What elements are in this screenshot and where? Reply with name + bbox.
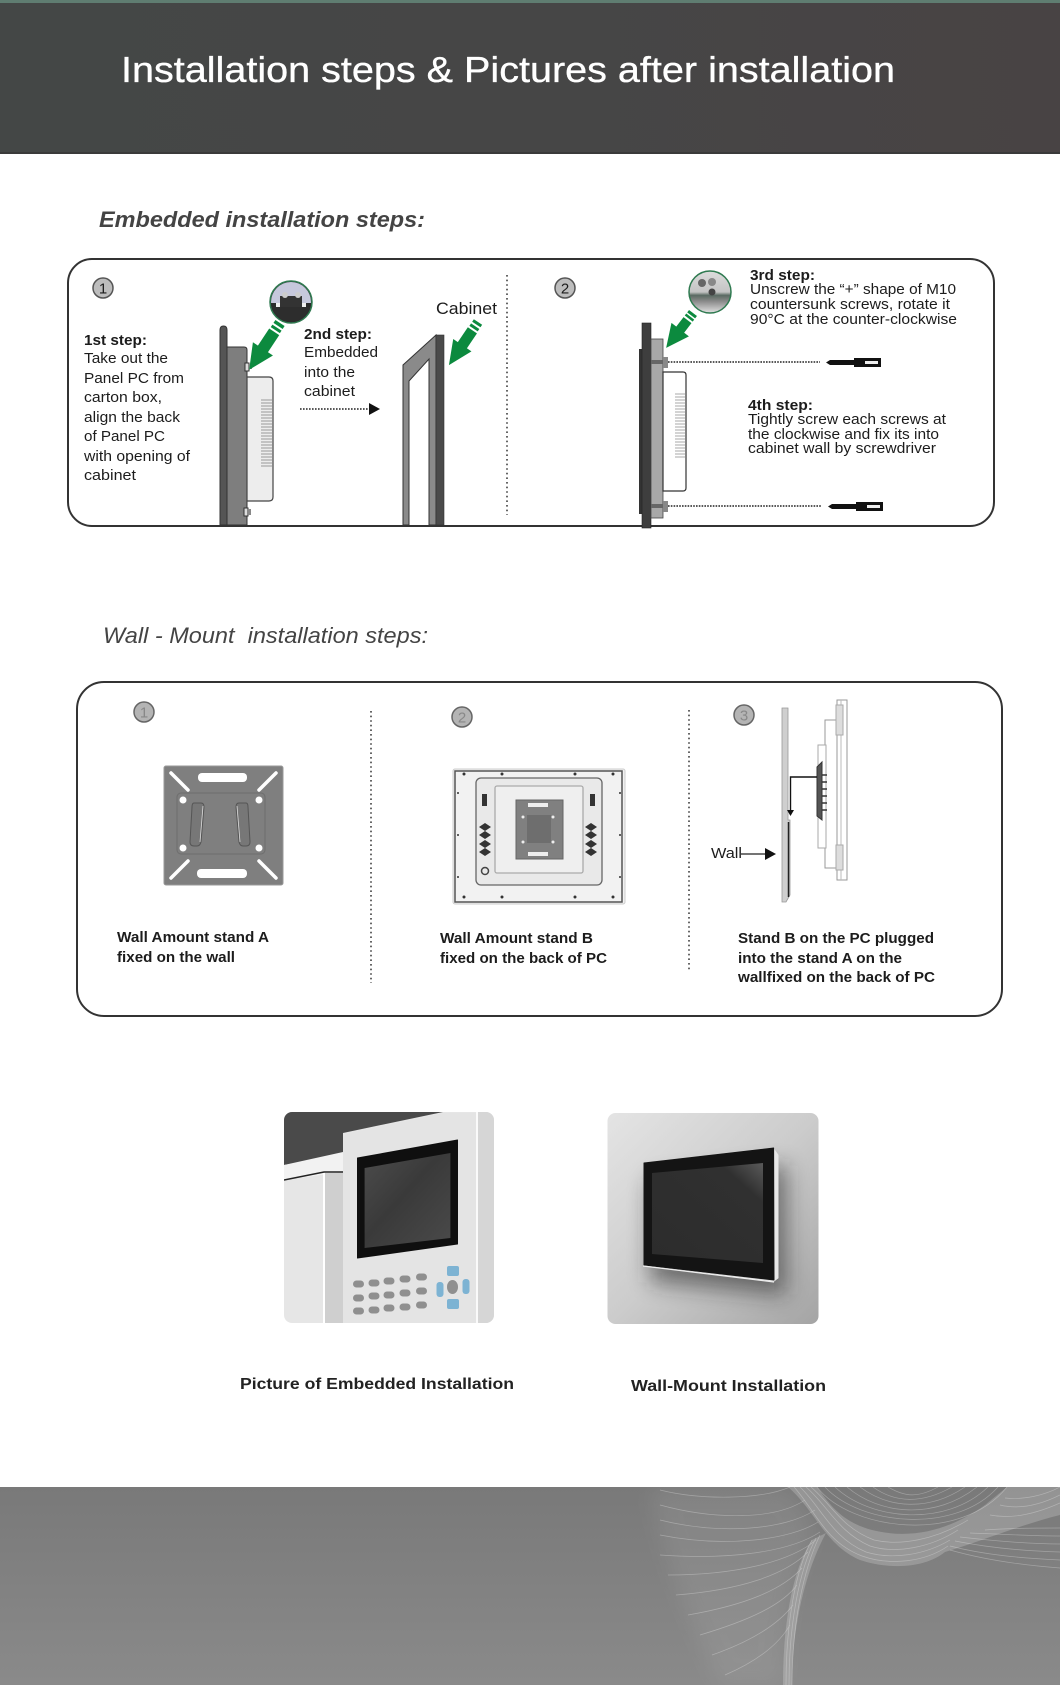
arrow: dotted to cabinet [300, 403, 380, 415]
text: 4th step: the clockwise and fix its into [748, 427, 939, 443]
photo: wall-mount installation [608, 1113, 818, 1324]
step number 1 [134, 702, 154, 722]
text: stand A caption: Wall Amount stand A [117, 930, 270, 946]
text: stand A caption [117, 930, 270, 966]
heading: embedded installation steps: Embedded installation steps: [99, 207, 425, 232]
footer band with wave pattern [0, 1487, 1060, 1685]
text: stand A caption: fixed on the wall [117, 950, 235, 966]
text: 1st step: Take out the [84, 351, 168, 367]
stand B on back of PC [453, 769, 625, 904]
text: stand B into A caption: Stand B on the PC plugged [738, 931, 934, 947]
text: 2nd step: into the [304, 365, 355, 381]
panel PC side view [220, 326, 273, 525]
text: 1st step: Panel PC from [84, 371, 184, 387]
divider [688, 710, 690, 972]
heading: wall-mount installation steps: Wall - Mount installation steps: [103, 623, 428, 648]
text: 2nd step: cabinet [304, 384, 355, 400]
text: 1st step: align the back [84, 410, 181, 426]
arrow: green to connector [239, 316, 290, 376]
wall and PC side view [782, 700, 847, 902]
cabinet side view [403, 335, 444, 525]
step number 3 [734, 705, 754, 725]
arrow: green to screw [657, 306, 702, 355]
step number 1: 1 [99, 280, 107, 298]
text: 1st step: of Panel PC [84, 429, 165, 445]
text: stand B caption: fixed on the back of PC [440, 951, 608, 967]
text: stand B into A caption: into the stand A on the [738, 951, 902, 967]
text: 1st step: cabinet [84, 468, 136, 484]
label: wall with arrow [711, 845, 776, 862]
label: cabinet: Cabinet [436, 300, 497, 318]
text: 1st step: carton box, [84, 390, 162, 406]
screw lower with dotted guide [668, 502, 883, 511]
text: 1st step: 1st step: [84, 333, 147, 349]
text: 2nd step: Embedded [304, 345, 378, 361]
stand A plate [164, 766, 283, 885]
text: 2nd step [304, 327, 378, 400]
step number 2 [452, 707, 472, 727]
step number 2: 2 [458, 710, 466, 726]
step number 2: 2 [561, 280, 569, 298]
text: 4th step: cabinet wall by screwdriver [748, 441, 936, 457]
header banner [0, 0, 1060, 154]
divider [370, 711, 372, 983]
text: 2nd step: 2nd step: [304, 327, 372, 343]
text: 3rd step: 90°C at the counter-clockwise [750, 312, 957, 328]
panel: wall-mount installation steps [77, 682, 1002, 1016]
arrow: green to cabinet [440, 316, 487, 371]
text: stand B into A caption [737, 931, 936, 986]
text: 4th step: 4th step: [748, 398, 813, 414]
text: 4th step: Tightly screw each screws at [748, 412, 946, 428]
text: 3rd step: 3rd step: [750, 268, 815, 284]
label: wall with arrow: Wall [711, 845, 742, 862]
text: 1st step [83, 333, 191, 484]
photo: embedded installation [284, 1112, 494, 1323]
divider [506, 275, 508, 515]
caption: wall-mount installation picture: Wall-Mount Installation [631, 1378, 826, 1395]
step number 1 [93, 278, 113, 298]
step number 3: 3 [740, 708, 748, 724]
text: 3rd step: Unscrew the “+” shape of M10 [750, 282, 956, 298]
text: 1st step: with opening of [83, 449, 191, 465]
text: 4th step [748, 398, 946, 457]
step number 1: 1 [140, 704, 148, 722]
text: 3rd step [750, 268, 957, 328]
icon: magnified connector detail [270, 281, 312, 323]
icon: magnified screw detail [689, 271, 731, 313]
text: 3rd step: countersunk screws, rotate it [750, 297, 950, 313]
text: stand B into A caption: wallfixed on the back of PC [737, 970, 936, 986]
step number 2 [555, 278, 575, 298]
title: Installation steps & Pictures after installation [121, 49, 895, 90]
panel PC mounted side view [639, 323, 686, 528]
screw upper with dotted guide [668, 358, 881, 367]
panel: embedded installation steps [68, 259, 994, 528]
text: stand B caption: Wall Amount stand B [440, 931, 593, 947]
text: stand B caption [440, 931, 608, 967]
caption: embedded installation picture: Picture of Embedded Installation [240, 1376, 514, 1393]
